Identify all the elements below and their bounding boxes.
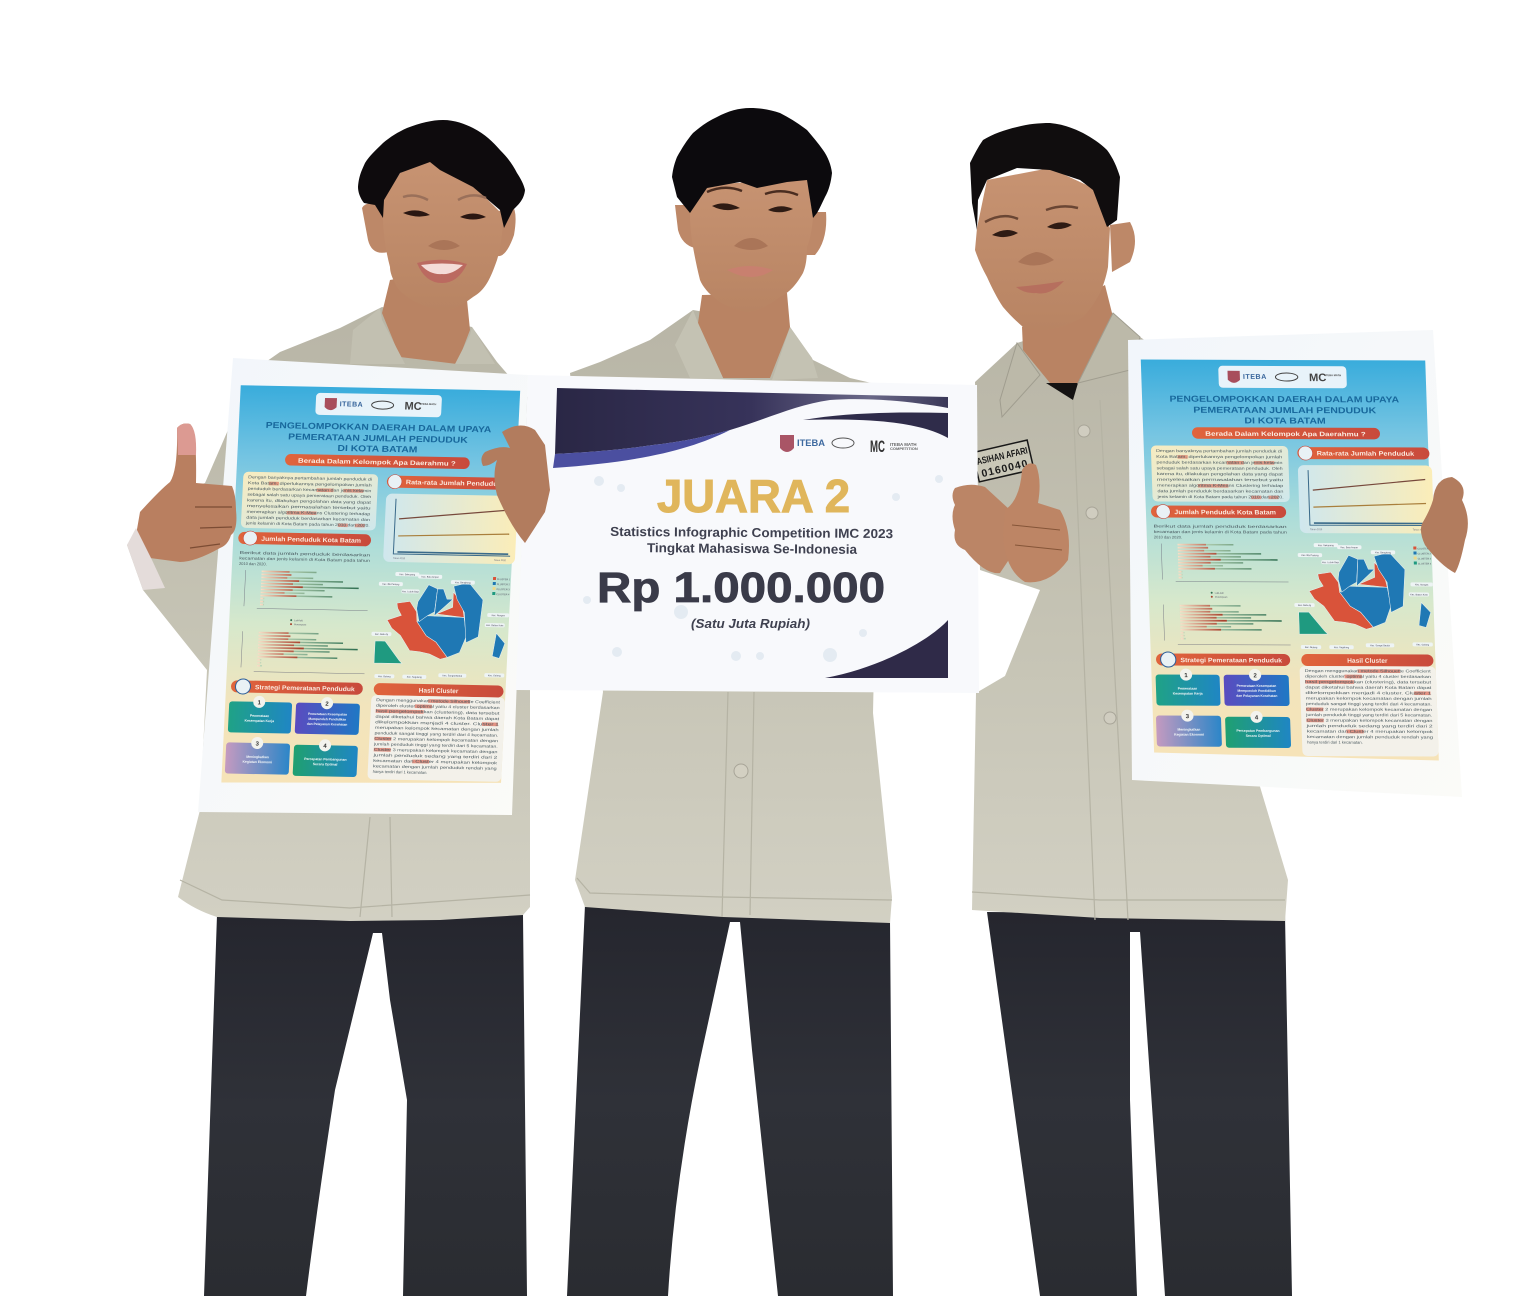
competition name: Tingkat Mahasiswa Se-Indonesia xyxy=(647,540,858,557)
strategy card 2: Memperoleh Pendidikan xyxy=(308,717,346,722)
name tape: 0160040 xyxy=(980,458,1030,480)
heading: cluster result xyxy=(373,683,504,698)
ears xyxy=(362,203,516,256)
map labels: Kec. Batam Kota xyxy=(486,624,504,627)
map legend xyxy=(1413,546,1432,565)
logo box: ITEBA MATH xyxy=(1325,373,1341,377)
hand: centre student holding board xyxy=(952,485,1012,573)
poster title xyxy=(264,420,492,456)
map labels: Kec. Batu Aji xyxy=(375,633,388,636)
map legend: CLUSTER 3 xyxy=(1418,557,1432,560)
strategy card 3: 3 xyxy=(1186,714,1190,720)
map labels: Kec. Sungai Beduk xyxy=(442,675,463,678)
logo box xyxy=(1218,366,1347,388)
cluster result text: jumlah penduduk sedang yang terdiri dari 2 xyxy=(372,752,499,760)
logos: ITEBA xyxy=(797,438,825,449)
nose shadow xyxy=(428,240,460,250)
shirt placket and hem xyxy=(577,692,892,917)
intro text box: sebagai salah satu upaya pemerataan penduduk. Oleh xyxy=(247,492,371,499)
strategy card 3: Meningkatkan xyxy=(1177,728,1200,732)
competition name: Statistics Infographic Competition IMC 2023 xyxy=(610,524,893,541)
hand: left student holding board xyxy=(481,425,550,543)
hand: right student thumbs up xyxy=(1003,463,1069,582)
ears xyxy=(675,205,826,255)
heading: cluster result: Hasil Cluster xyxy=(1347,658,1388,665)
cluster result text: diperoleh cluster optimal yaitu 4 cluster berdasarkan xyxy=(1305,674,1431,679)
collar xyxy=(675,310,818,380)
bar chart 2010 xyxy=(1161,544,1289,582)
trousers xyxy=(987,912,1292,1296)
logo box: ITEBA xyxy=(1243,374,1267,381)
strategy card 1: Pemerataan xyxy=(1178,687,1197,691)
shirt xyxy=(570,310,892,923)
strategy card 1: 1 xyxy=(1184,673,1188,679)
poster content xyxy=(221,385,523,788)
heading: average population: Rata-rata Jumlah Penduduk xyxy=(406,479,502,488)
strategy card 4: 4 xyxy=(323,744,327,750)
face xyxy=(690,178,813,312)
map labels: Kec. Sekupang xyxy=(399,574,416,576)
intro text box: Kota Batam, diperlukannya pengelompokan jumlah xyxy=(248,480,372,488)
line chart xyxy=(383,494,518,564)
population text xyxy=(1153,524,1287,540)
strategy card 1 xyxy=(1155,669,1221,706)
line chart: Tahun 2010 xyxy=(393,558,406,560)
cluster result text: kecamatan dan Cluster 4 merupakan kelompok xyxy=(1307,729,1434,734)
logo box: ITEBA MATH xyxy=(421,402,437,406)
poster paper xyxy=(1128,330,1462,797)
hand: right student holding poster xyxy=(1421,477,1468,573)
heading: average population xyxy=(387,474,517,491)
strategy card 4: Secara Optimal xyxy=(313,762,338,767)
strategy card 2 xyxy=(295,697,360,735)
strategy card 1 xyxy=(228,695,292,734)
shirt placket xyxy=(180,817,530,917)
heading: strategy xyxy=(1156,652,1290,667)
map labels: Kec. Nongsa xyxy=(1415,584,1429,586)
eyes and brows xyxy=(992,222,1072,237)
smile xyxy=(417,260,467,283)
intro text box: karena itu, dilakukan pengolahan data yang dapat xyxy=(1157,471,1284,476)
person: centre student xyxy=(567,108,893,1296)
poster title: DI KOTA BATAM xyxy=(1244,415,1326,426)
name tape: ASIHAN AFARI xyxy=(976,445,1029,468)
strategy card 2: Memperoleh Pendidikan xyxy=(1237,689,1276,693)
map labels: Kec. Sagulung xyxy=(407,677,422,679)
cluster result text xyxy=(367,695,505,782)
competition name xyxy=(610,524,893,557)
cluster result text: Cluster 2 merupakan kelompok kecamatan dengan xyxy=(374,736,498,743)
map labels: Kec. Batam Kota xyxy=(1410,593,1428,596)
cuff xyxy=(127,528,165,590)
prize amount: Rp 1.000.000 xyxy=(597,564,885,612)
map labels: Kec. Blk Padang xyxy=(382,584,400,586)
map labels: Kec. Sagulung xyxy=(1334,647,1350,649)
strategy card 4: 4 xyxy=(1255,715,1259,721)
cluster result text: kecamatan dengan jumlah penduduk rendah yang xyxy=(373,763,497,771)
poster title: PENGELOMPOKKAN DAERAH DALAM UPAYA xyxy=(1169,394,1400,404)
blue swoosh xyxy=(553,430,730,468)
subtitle pill xyxy=(1192,427,1380,439)
neck xyxy=(698,293,790,378)
line chart: Tahun 2020 xyxy=(1413,529,1426,531)
population text: 2010 dan 2020. xyxy=(1154,535,1182,540)
poster title xyxy=(1169,394,1401,426)
bar chart legend: Laki-laki xyxy=(294,619,303,622)
logo box: ITEBA xyxy=(340,401,363,409)
heading: population: Jumlah Penduduk Kota Batam xyxy=(261,536,362,545)
ear xyxy=(1110,222,1135,272)
smile xyxy=(1016,281,1064,294)
cluster result text: dapat diketahui bahwa daerah Kota Batam dapat xyxy=(1305,685,1433,690)
intro text box: data jumlah penduduk berdasarkan kecamatan dan xyxy=(1157,488,1283,494)
shirt xyxy=(972,313,1288,921)
map labels: Kec. Bulang xyxy=(1305,647,1318,649)
logos: MC xyxy=(870,437,885,456)
subtitle pill: Berada Dalam Kelompok Apa Daerahmu ? xyxy=(298,458,456,468)
intro text box xyxy=(1151,446,1290,502)
intro text box: jenis kelamin di Kota Batam pada tahun 2010 dan 2020. xyxy=(245,520,370,528)
cluster result text: jumlah penduduk sedang yang terdiri dari 2 xyxy=(1305,723,1434,728)
neck xyxy=(382,260,495,364)
strategy card 1: 1 xyxy=(257,700,262,706)
map labels: Kec. Lubuk Baja xyxy=(402,591,420,594)
subtitle pill: Berada Dalam Kelompok Apa Daerahmu ? xyxy=(1205,431,1366,438)
prize board xyxy=(516,375,979,693)
strategy card 4 xyxy=(1225,711,1291,748)
bar chart 2010 xyxy=(244,570,369,611)
board background xyxy=(516,375,979,693)
cluster result text: penduduk sangat tinggi yang terdiri dari 4 kecamatan. xyxy=(1306,701,1432,706)
population text: kecamatan dan jenis kelamin di Kota Batam pada tahun xyxy=(239,555,370,563)
poster: right xyxy=(1128,330,1462,797)
map legend: CLUSTER 4 xyxy=(496,593,510,596)
map legend: CLUSTER 1 xyxy=(497,578,511,581)
cluster result text: merupakan kelompok kecamatan dengan jumlah xyxy=(375,725,499,732)
strategy card 2 xyxy=(1223,669,1290,706)
heading: population: Jumlah Penduduk Kota Batam xyxy=(1174,509,1277,516)
strategy card 2: dan Pelayanan Kesehatan xyxy=(307,722,347,727)
collar xyxy=(1000,313,1140,417)
logos: COMPETITION xyxy=(890,446,918,451)
cluster result text: Cluster 2 merupakan kelompok kecamatan dengan xyxy=(1306,707,1432,712)
heading: average population: Rata-rata Jumlah Penduduk xyxy=(1317,450,1415,458)
shirt xyxy=(127,307,530,921)
map legend: CLUSTER 1 xyxy=(1417,547,1431,550)
heading: population xyxy=(238,531,371,547)
hand: left student thumbs up xyxy=(127,424,236,590)
bar chart legend xyxy=(1211,592,1228,599)
strategy card 2: 2 xyxy=(1253,673,1258,679)
map legend: CLUSTER 3 xyxy=(496,588,510,591)
strategy card 3 xyxy=(225,736,290,775)
top swoosh xyxy=(555,388,948,454)
cluster result text: jumlah penduduk tinggi yang terdiri dari 5 kecamatan. xyxy=(373,741,498,749)
population text: Berikut data jumlah penduduk berdasarkan xyxy=(1153,524,1287,529)
strategy card 4 xyxy=(293,739,358,777)
heading: average population xyxy=(1297,446,1430,461)
name tape xyxy=(973,440,1034,482)
poster title: PEMERATAAN JUMLAH PENDUDUK xyxy=(1193,405,1377,415)
heading: strategy: Strategi Pemerataan Penduduk xyxy=(1180,657,1283,664)
strategy card 2: Pemerataan Kesempatan xyxy=(1237,684,1276,688)
strategy card 3: Meningkatkan xyxy=(246,755,269,759)
map labels: Kec. Bulang xyxy=(378,676,391,678)
line chart xyxy=(1298,465,1434,534)
cluster result text: kecamatan dan Cluster 4 merupakan kelompok xyxy=(373,758,497,765)
map labels: Kec. Bengkong xyxy=(1375,552,1392,554)
bottom right swoosh xyxy=(825,620,948,678)
heading: strategy: Strategi Pemerataan Penduduk xyxy=(255,684,355,693)
intro text box: karena itu, dilakukan pengolahan data yang dapat xyxy=(247,497,372,505)
population text: Berikut data jumlah penduduk berdasarkan xyxy=(239,550,370,557)
map legend: CLUSTER 2 xyxy=(1418,552,1432,555)
cluster result text: dikelompokkan menjadi 4 cluster. Cluster 1 xyxy=(375,719,500,727)
bar chart legend: Perempuan xyxy=(294,623,307,626)
heading: Juara 2: JUARA 2 xyxy=(657,470,850,522)
strategy card 4: Secara Optimal xyxy=(1246,734,1271,738)
prize in words: (Satu Juta Rupiah) xyxy=(691,617,810,631)
intro text box: Dengan banyaknya pertambahan jumlah penduduk di xyxy=(248,474,372,482)
poster content xyxy=(1141,360,1442,761)
poster paper xyxy=(198,358,528,815)
map labels: Kec. Sungai Beduk xyxy=(1370,645,1391,647)
heading: cluster result: Hasil Cluster xyxy=(419,687,459,695)
person: left student xyxy=(127,120,530,1296)
intro text box: jenis kelamin di Kota Batam pada tahun 2010 dan 2020. xyxy=(1156,494,1284,499)
strategy card 1: Kesempatan Kerja xyxy=(1173,692,1203,696)
face xyxy=(383,160,503,310)
strategy card 1: Kesempatan Kerja xyxy=(244,719,274,723)
strategy card 3: Kegiatan Ekonomi xyxy=(242,760,272,764)
population text: 2010 dan 2020. xyxy=(239,561,267,566)
bar chart 2020 xyxy=(241,631,366,674)
button xyxy=(734,764,748,778)
cluster map xyxy=(1297,552,1431,634)
neck xyxy=(1022,285,1113,383)
cluster result text: Dengan menggunakan metode Silhouette Coefficient xyxy=(376,697,501,705)
hair xyxy=(358,120,525,228)
faint bubbles xyxy=(583,475,943,662)
map labels xyxy=(1292,543,1435,650)
hair xyxy=(970,123,1120,230)
cluster map xyxy=(374,581,508,666)
cluster result text: diperoleh cluster optimal yaitu 4 cluster berdasarkan xyxy=(376,703,500,710)
cluster result text: hasil pengelompokkan (clustering), data tersebut xyxy=(376,708,501,716)
line chart: Tahun 2010 xyxy=(1310,529,1323,531)
logo box: MC xyxy=(1309,372,1327,384)
cluster result text: dikelompokkan menjadi 4 cluster. Cluster 1 xyxy=(1305,690,1433,695)
map labels: Kec. Galang xyxy=(1416,644,1430,646)
population text xyxy=(239,550,370,568)
lips xyxy=(727,266,773,277)
cluster result text: merupakan kelompok kecamatan dengan jumlah xyxy=(1306,696,1432,701)
logos xyxy=(780,435,918,456)
map labels: Kec. Blk Padang xyxy=(1301,555,1319,557)
logos: ITEBA MATH xyxy=(890,442,917,447)
map labels xyxy=(369,572,511,681)
black undershirt xyxy=(1046,383,1078,400)
logo box: MC xyxy=(404,401,422,413)
buttons xyxy=(1078,425,1116,724)
intro text box: Kota Batam, diperlukannya pengelompokan jumlah xyxy=(1156,454,1282,459)
cluster result text: dapat diketahui bahwa daerah Kota Batam dapat xyxy=(375,714,501,721)
cluster result text: kecamatan dengan jumlah penduduk rendah yang xyxy=(1307,734,1433,739)
strategy card 3 xyxy=(1156,710,1222,747)
intro text box: menerapkan algoritma K-Means Clustering terhadap xyxy=(1157,483,1284,488)
poster title: DI KOTA BATAM xyxy=(337,443,418,454)
logo box xyxy=(315,393,442,417)
intro text box: Dengan banyaknya pertambahan jumlah penduduk di xyxy=(1156,448,1282,453)
bar chart legend xyxy=(290,619,307,626)
intro text box: sebagai salah satu upaya pemerataan penduduk. Oleh xyxy=(1157,465,1283,471)
line chart: Tahun 2020 xyxy=(494,560,507,562)
poster title: PEMERATAAN JUMLAH PENDUDUK xyxy=(288,431,469,445)
map legend: CLUSTER 4 xyxy=(1418,562,1432,565)
heading: population xyxy=(1151,505,1286,519)
intro text box xyxy=(241,472,378,530)
map labels: Kec. Sekupang xyxy=(1318,545,1334,547)
trousers xyxy=(567,905,893,1296)
intro text box: penduduk berdasarkan kecamatan dan jenis kelamin xyxy=(1156,460,1282,465)
strategy card 4: Percepatan Pembangunan xyxy=(1236,729,1280,733)
heading: strategy xyxy=(231,679,363,696)
intro text box: penduduk berdasarkan kecamatan dan jenis kelamin xyxy=(248,486,372,493)
person: right student xyxy=(970,123,1292,1296)
bar chart legend: Laki-laki xyxy=(1215,592,1224,595)
intro text box: menerapkan algoritma K-Means Clustering terhadap xyxy=(246,509,371,516)
map labels: Kec. Batu Aji xyxy=(1298,604,1312,607)
cluster result text xyxy=(1299,666,1439,757)
strategy card 3: Kegiatan Ekonomi xyxy=(1174,733,1204,737)
map labels: Kec. Nongsa xyxy=(492,615,506,617)
strategy card 1: Pemerataan xyxy=(250,714,269,718)
intro text box: data jumlah penduduk berdasarkan kecamatan dan xyxy=(246,515,370,522)
shirt placket and hem xyxy=(972,400,1285,920)
cluster result text: hanya terdiri dari 1 kecamatan. xyxy=(373,769,428,775)
eyes and brows xyxy=(403,210,486,220)
upper right swoosh xyxy=(803,413,948,438)
map legend: CLUSTER 2 xyxy=(497,583,511,586)
map labels: Kec. Batu Ampar xyxy=(1341,546,1358,549)
cluster result text: Cluster 3 merupakan kelompok kecamatan dengan xyxy=(1306,718,1432,723)
collar xyxy=(350,308,495,364)
nose shadow xyxy=(734,238,768,250)
map labels: Kec. Galang xyxy=(488,675,501,677)
eyes and brows xyxy=(712,203,793,212)
intro text box: menyelesaikan permasalahan tersebut yaitu xyxy=(247,503,371,510)
strategy card 2: Pemerataan Kesempatan xyxy=(308,712,347,717)
map legend xyxy=(492,577,511,596)
map labels: Kec. Lubuk Baja xyxy=(1322,562,1340,564)
intro text box: menyelesaikan permasalahan tersebut yaitu xyxy=(1157,477,1283,482)
cluster result text: jumlah penduduk tinggi yang terdiri dari 5 kecamatan. xyxy=(1305,712,1432,717)
cluster result text: Cluster 3 merupakan kelompok kecamatan dengan xyxy=(374,747,498,754)
strategy card 3: 3 xyxy=(255,741,260,748)
cluster result text: hanya terdiri dari 1 kecamatan. xyxy=(1307,740,1363,745)
hair xyxy=(672,108,832,218)
subtitle pill xyxy=(285,454,470,469)
bar chart 2020 xyxy=(1163,605,1291,645)
cluster result text: Dengan menggunakan metode Silhouette Coefficient xyxy=(1305,668,1432,673)
heading: cluster result xyxy=(1301,654,1434,667)
poster title: PENGELOMPOKKAN DAERAH DALAM UPAYA xyxy=(266,420,492,434)
trousers xyxy=(204,915,527,1296)
map labels: Kec. Bengkong xyxy=(455,582,471,585)
map labels: Kec. Batu Ampar xyxy=(421,576,439,579)
poster: left xyxy=(198,358,528,815)
cluster result text: penduduk sangat tinggi yang terdiri dari 4 kecamatan. xyxy=(374,730,498,738)
nose shadow xyxy=(1018,252,1054,266)
strategy card 2: dan Pelayanan Kesehatan xyxy=(1236,694,1277,698)
bar chart legend: Perempuan xyxy=(1215,596,1228,599)
face xyxy=(975,168,1110,330)
strategy card 2: 2 xyxy=(325,702,330,708)
population text: kecamatan dan jenis kelamin di Kota Batam pada tahun xyxy=(1154,529,1287,534)
cluster result text: hasil pengelompokkan (clustering), data tersebut xyxy=(1305,679,1432,684)
strategy card 4: Percepatan Pembangunan xyxy=(304,757,347,762)
